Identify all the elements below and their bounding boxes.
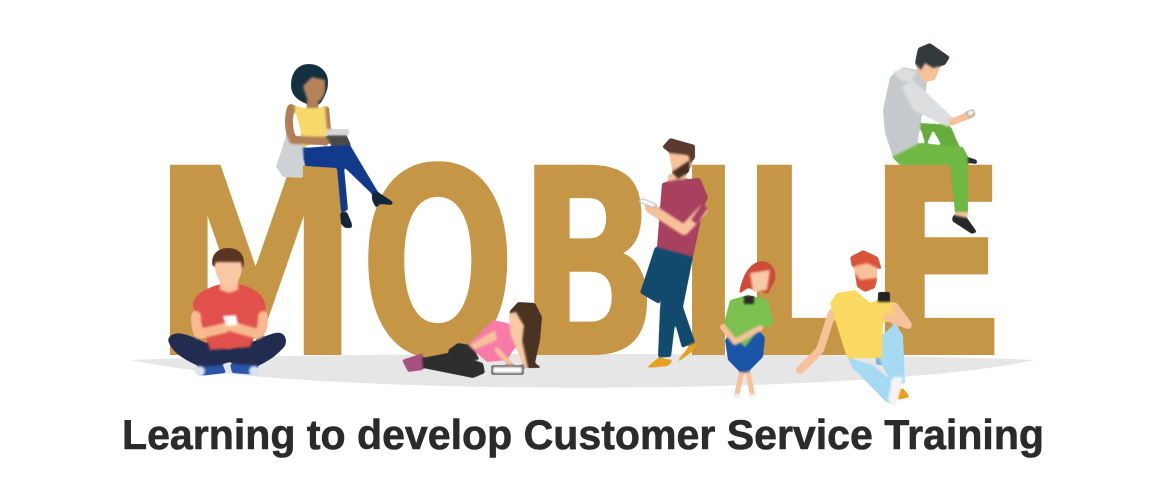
figure: woman sitting on M with tablet [276,64,393,228]
big word: MOBILE: L [740,114,858,417]
big word: MOBILE: E [866,114,1010,418]
big word: MOBILE: I [676,114,741,417]
big word: MOBILE: O [359,114,517,417]
figure: bearded man in yellow shirt sitting [800,250,910,408]
figure: woman in green crouching with phone [723,261,775,398]
caption: Learning to develop Customer Service Training [122,411,1044,458]
big word: MOBILE: M [150,114,361,418]
figure: girl lying on the floor with tablet [402,302,542,378]
big word: MOBILE: B [517,113,660,417]
figure: bearded man standing with phone [638,138,708,368]
figure: man in hoodie sitting on E [883,43,977,234]
ground shadow [131,354,1035,388]
big word: MOBILE [150,113,1010,418]
figure: man sitting cross-legged in red shirt [168,248,286,376]
